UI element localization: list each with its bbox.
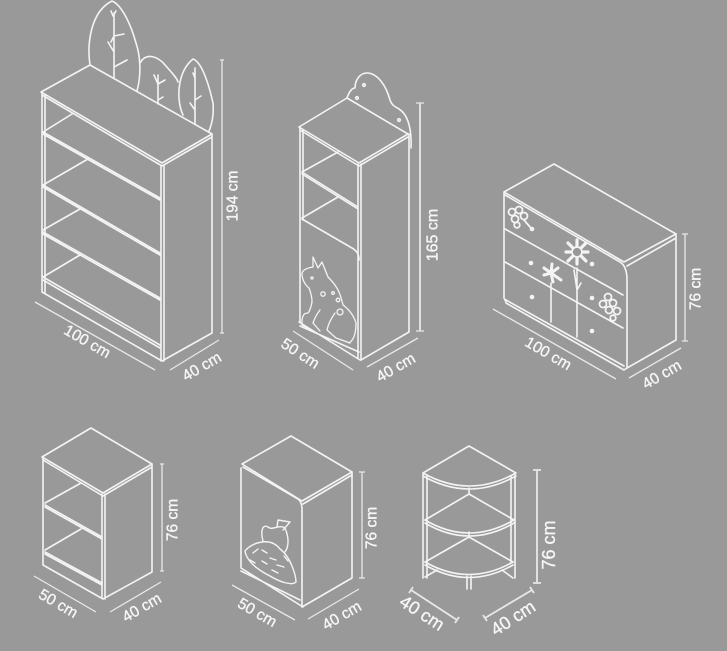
label: 76 cm: 76 cm <box>539 520 559 570</box>
cabinet body <box>299 98 409 360</box>
furniture: narrow cabinet with dog door <box>278 73 442 386</box>
label: 76 cm: 76 cm <box>688 268 704 310</box>
dimension lines <box>232 472 365 620</box>
furniture: small open shelf <box>34 428 182 626</box>
cabinet body <box>241 436 352 607</box>
label: 100 cm: 100 cm <box>522 334 574 374</box>
label: 76 cm: 76 cm <box>364 507 380 549</box>
label: 40 cm: 40 cm <box>373 350 419 386</box>
label: 100 cm: 100 cm <box>61 322 113 362</box>
cabinet body <box>42 428 152 599</box>
label: 40 cm: 40 cm <box>487 596 539 640</box>
label: 40 cm: 40 cm <box>319 598 365 634</box>
dimension lines <box>409 470 541 623</box>
cabinet body <box>423 446 516 589</box>
icon: hedgehog and apple <box>245 520 296 584</box>
flower: small daisy <box>544 264 561 282</box>
label: 50 cm: 50 cm <box>234 595 280 631</box>
label: 40 cm: 40 cm <box>179 349 225 385</box>
furniture: tall bookcase with trees <box>35 1 242 385</box>
label: 76 cm: 76 cm <box>164 499 182 541</box>
label: 165 cm: 165 cm <box>424 209 442 261</box>
label: 50 cm: 50 cm <box>35 586 81 622</box>
label: 40 cm: 40 cm <box>119 590 165 626</box>
butterfly: top left <box>508 206 530 228</box>
dimension lines <box>34 464 164 612</box>
furniture: small door cabinet with hedgehog <box>232 436 380 634</box>
furniture: corner shelf <box>396 446 559 640</box>
icon: cloud decoration <box>347 73 411 148</box>
butterfly: right <box>600 294 620 321</box>
dimension lines <box>293 103 424 370</box>
label: 194 cm: 194 cm <box>224 171 242 221</box>
dimension lines <box>35 60 224 370</box>
furniture: dresser with flowers <box>493 164 704 393</box>
label: 40 cm: 40 cm <box>396 591 448 635</box>
cabinet body <box>504 164 676 370</box>
cabinet body <box>41 65 212 361</box>
icon: flowers and butterflies <box>508 206 620 321</box>
icon: dog <box>302 257 356 343</box>
label: 40 cm: 40 cm <box>639 357 685 393</box>
icon: tree decorations <box>89 1 213 131</box>
icon: drawer knobs <box>529 227 594 333</box>
label: 50 cm: 50 cm <box>278 335 322 373</box>
dimension lines <box>493 234 688 379</box>
flower: large daisy <box>566 240 588 264</box>
